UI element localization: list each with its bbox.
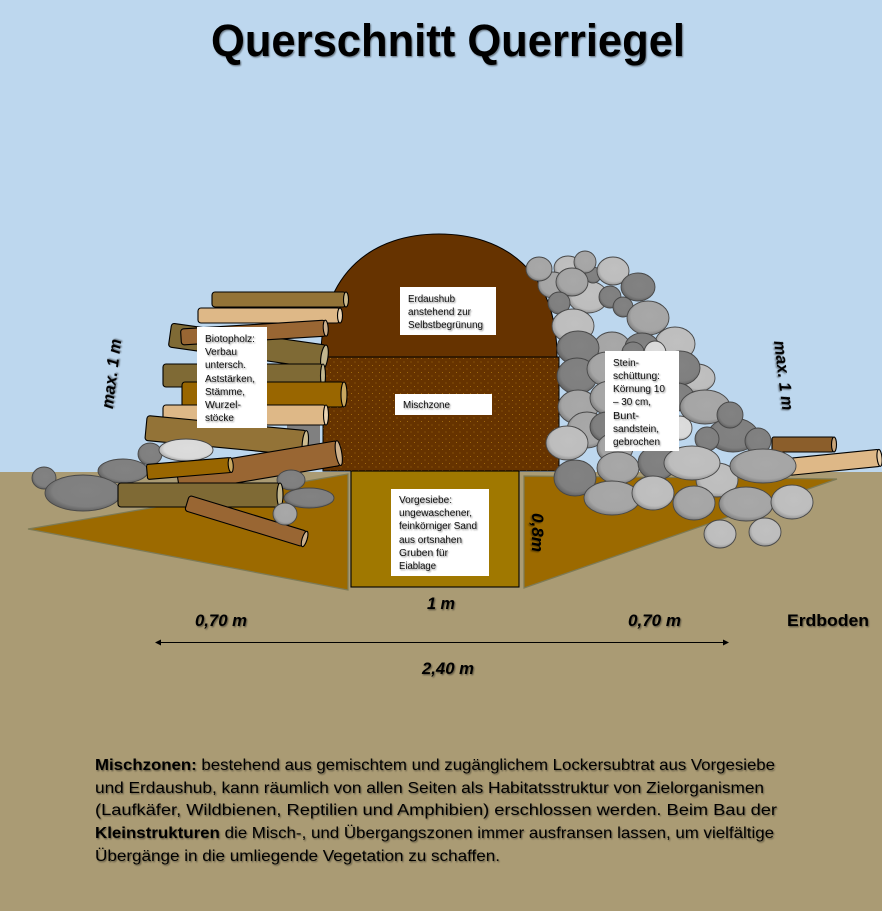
ground: Erdboden <box>0 472 882 911</box>
label: Steinschüttung: schüttung: <box>613 371 660 382</box>
arrow: total width <box>155 640 729 646</box>
label: Biotopholz <box>197 327 267 428</box>
dimension: 1 m: 1 m <box>427 594 455 613</box>
label: Erdboden: Erdboden <box>787 611 869 630</box>
label: Erdaushub: Selbstbegrünung <box>408 320 483 331</box>
label: Steinschüttung: gebrochen <box>613 437 660 448</box>
label: Steinschüttung: Körnung 10 <box>613 384 665 395</box>
wood stack: Biotopholz logs <box>145 292 348 492</box>
description text: Mischzonen: bestehend aus gemischtem und zugänglichem Lockersubtrat aus Vorgesiebe <box>95 757 775 774</box>
label: Mischzone <box>395 394 492 415</box>
left excavated wedge <box>28 474 348 590</box>
label: Vorgesiebe <box>391 489 489 576</box>
small stone on lower log <box>273 503 297 525</box>
label: Vorgesiebe: aus ortsnahen <box>399 535 462 546</box>
label: Biotopholz: Aststärken, <box>205 374 255 385</box>
label: Steinschüttung: Bunt- <box>613 411 639 422</box>
label: Biotopholz: Stämme, <box>205 387 245 398</box>
label: Biotopholz: untersch. <box>205 360 246 371</box>
gravel pile: front stones <box>554 428 813 548</box>
right small logs <box>772 437 882 475</box>
title: Querschnitt Querriegel <box>211 15 685 66</box>
dimension: 0,70 m left: 0,70 m <box>195 611 247 630</box>
dimension: 0,8m: 0,8m <box>528 513 547 552</box>
label: Steinschüttung: Stein- <box>613 358 639 369</box>
stone behind the wood stack <box>287 425 320 447</box>
label: Steinschüttung: sandstein, <box>613 424 659 435</box>
description text: (Laufkäfer, Wildbienen, Reptilien und Amphibien) erschlossen werden. Beim Bau der <box>95 802 778 819</box>
label: Erdaushub: Erdaushub <box>408 294 455 305</box>
label: Vorgesiebe: Gruben für <box>399 548 449 559</box>
description text: Übergänge in die umliegende Vegetation zu schaffen. <box>95 847 500 865</box>
dimension: max. 1 m left: max. 1 m <box>98 338 125 410</box>
label: Vorgesiebe: Eiablage <box>399 561 436 572</box>
label: Steinschüttung <box>605 351 679 451</box>
mixing zone: Mischzone <box>323 357 559 471</box>
dimension: max. 1 m right: max. 1 m <box>770 339 797 411</box>
label: Biotopholz: Verbau <box>205 347 237 358</box>
description text <box>95 757 778 865</box>
label: Erdaushub: anstehend zur <box>408 307 472 318</box>
label: Steinschüttung: – 30 cm, <box>613 397 651 408</box>
label: Vorgesiebe: ungewaschener, <box>399 508 472 519</box>
label: Vorgesiebe: feinkörniger Sand <box>399 521 477 532</box>
label: Erdaushub <box>400 287 496 335</box>
description text: und Erdaushub, kann räumlich von allen Seiten als Habitatsstruktur von Zielorganismen <box>95 780 764 797</box>
right excavated wedge <box>524 476 837 588</box>
label: Biotopholz: Biotopholz: <box>205 334 255 345</box>
dimension: 2,40 m: 2,40 m <box>421 659 474 678</box>
gravel pile: stone fill on the right <box>526 251 758 460</box>
label: Biotopholz: Wurzel- <box>205 400 241 411</box>
left stones <box>32 439 334 511</box>
lower logs <box>118 457 309 547</box>
dimension: 0,70 m right: 0,70 m <box>628 611 681 630</box>
label: Vorgesiebe: Vorgesiebe: <box>399 495 452 506</box>
description text: Kleinstrukturen die Misch-, und Übergangszonen immer ausfransen lassen, um vielfältige <box>95 824 774 842</box>
mound top: Erdaushub dome <box>321 234 557 357</box>
sky background <box>0 0 882 472</box>
sand pit: Vorgesiebe <box>351 471 519 587</box>
label: Biotopholz: stöcke <box>205 413 234 424</box>
label: Mischzone: Mischzone <box>403 400 450 411</box>
